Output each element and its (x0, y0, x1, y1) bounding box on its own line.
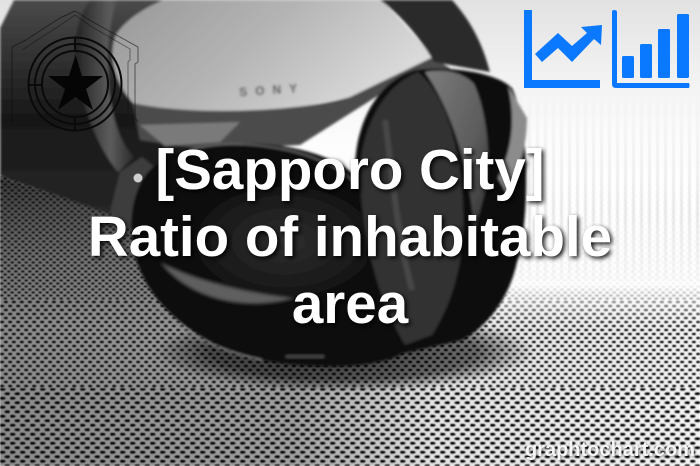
title shadow: area (294, 274, 411, 337)
icon: blue bar chart (612, 10, 690, 88)
case lower rim (133, 57, 460, 150)
site watermark: graphtochart.com (525, 439, 695, 461)
hinge (110, 157, 158, 230)
title shadow (90, 140, 614, 337)
button on cup (285, 354, 325, 359)
faint vertical stripes at upper right (520, 135, 699, 270)
title shadow: [Sapporo City] (157, 140, 547, 203)
pad crease highlights (385, 120, 412, 290)
left cup highlight (160, 262, 295, 304)
dim lighting on left of mesh (0, 176, 260, 326)
right cup padding (360, 72, 463, 345)
left cup rim line (155, 305, 262, 360)
three rings (28, 38, 122, 130)
title text (88, 138, 612, 335)
title text: [Sapporo City] (155, 138, 545, 201)
headband right (380, 0, 490, 72)
rim highlight (140, 122, 240, 146)
title text: area (292, 272, 409, 335)
charging case (112, 0, 433, 113)
title text: Ratio of inhabitable (88, 205, 612, 268)
headband left (75, 0, 134, 172)
shield outline (12, 11, 138, 122)
icon: emblem with star, rings and shield outline (12, 11, 138, 131)
backdrop: light surface at top (0, 0, 700, 290)
title (88, 138, 614, 337)
right cup side strip (498, 86, 527, 192)
ring connectors (28, 37, 75, 131)
dark area at left behind headband (0, 0, 260, 260)
cast shadow under the cups (155, 312, 535, 392)
perforated mesh ground (0, 135, 700, 466)
right ear cup (355, 69, 526, 355)
left cup inner pad (180, 170, 390, 300)
SONY logo on case: SONY (239, 81, 306, 99)
star (48, 55, 103, 110)
pivot screw on hinge (134, 174, 142, 182)
title shadow: Ratio of inhabitable (90, 207, 614, 270)
icon: blue line chart with arrow (524, 10, 602, 88)
left ear cup (131, 143, 402, 366)
right cup rim band (425, 71, 488, 235)
white washout at upper right of mesh (420, 170, 700, 330)
site watermark: graphtochart.com (526, 440, 696, 462)
